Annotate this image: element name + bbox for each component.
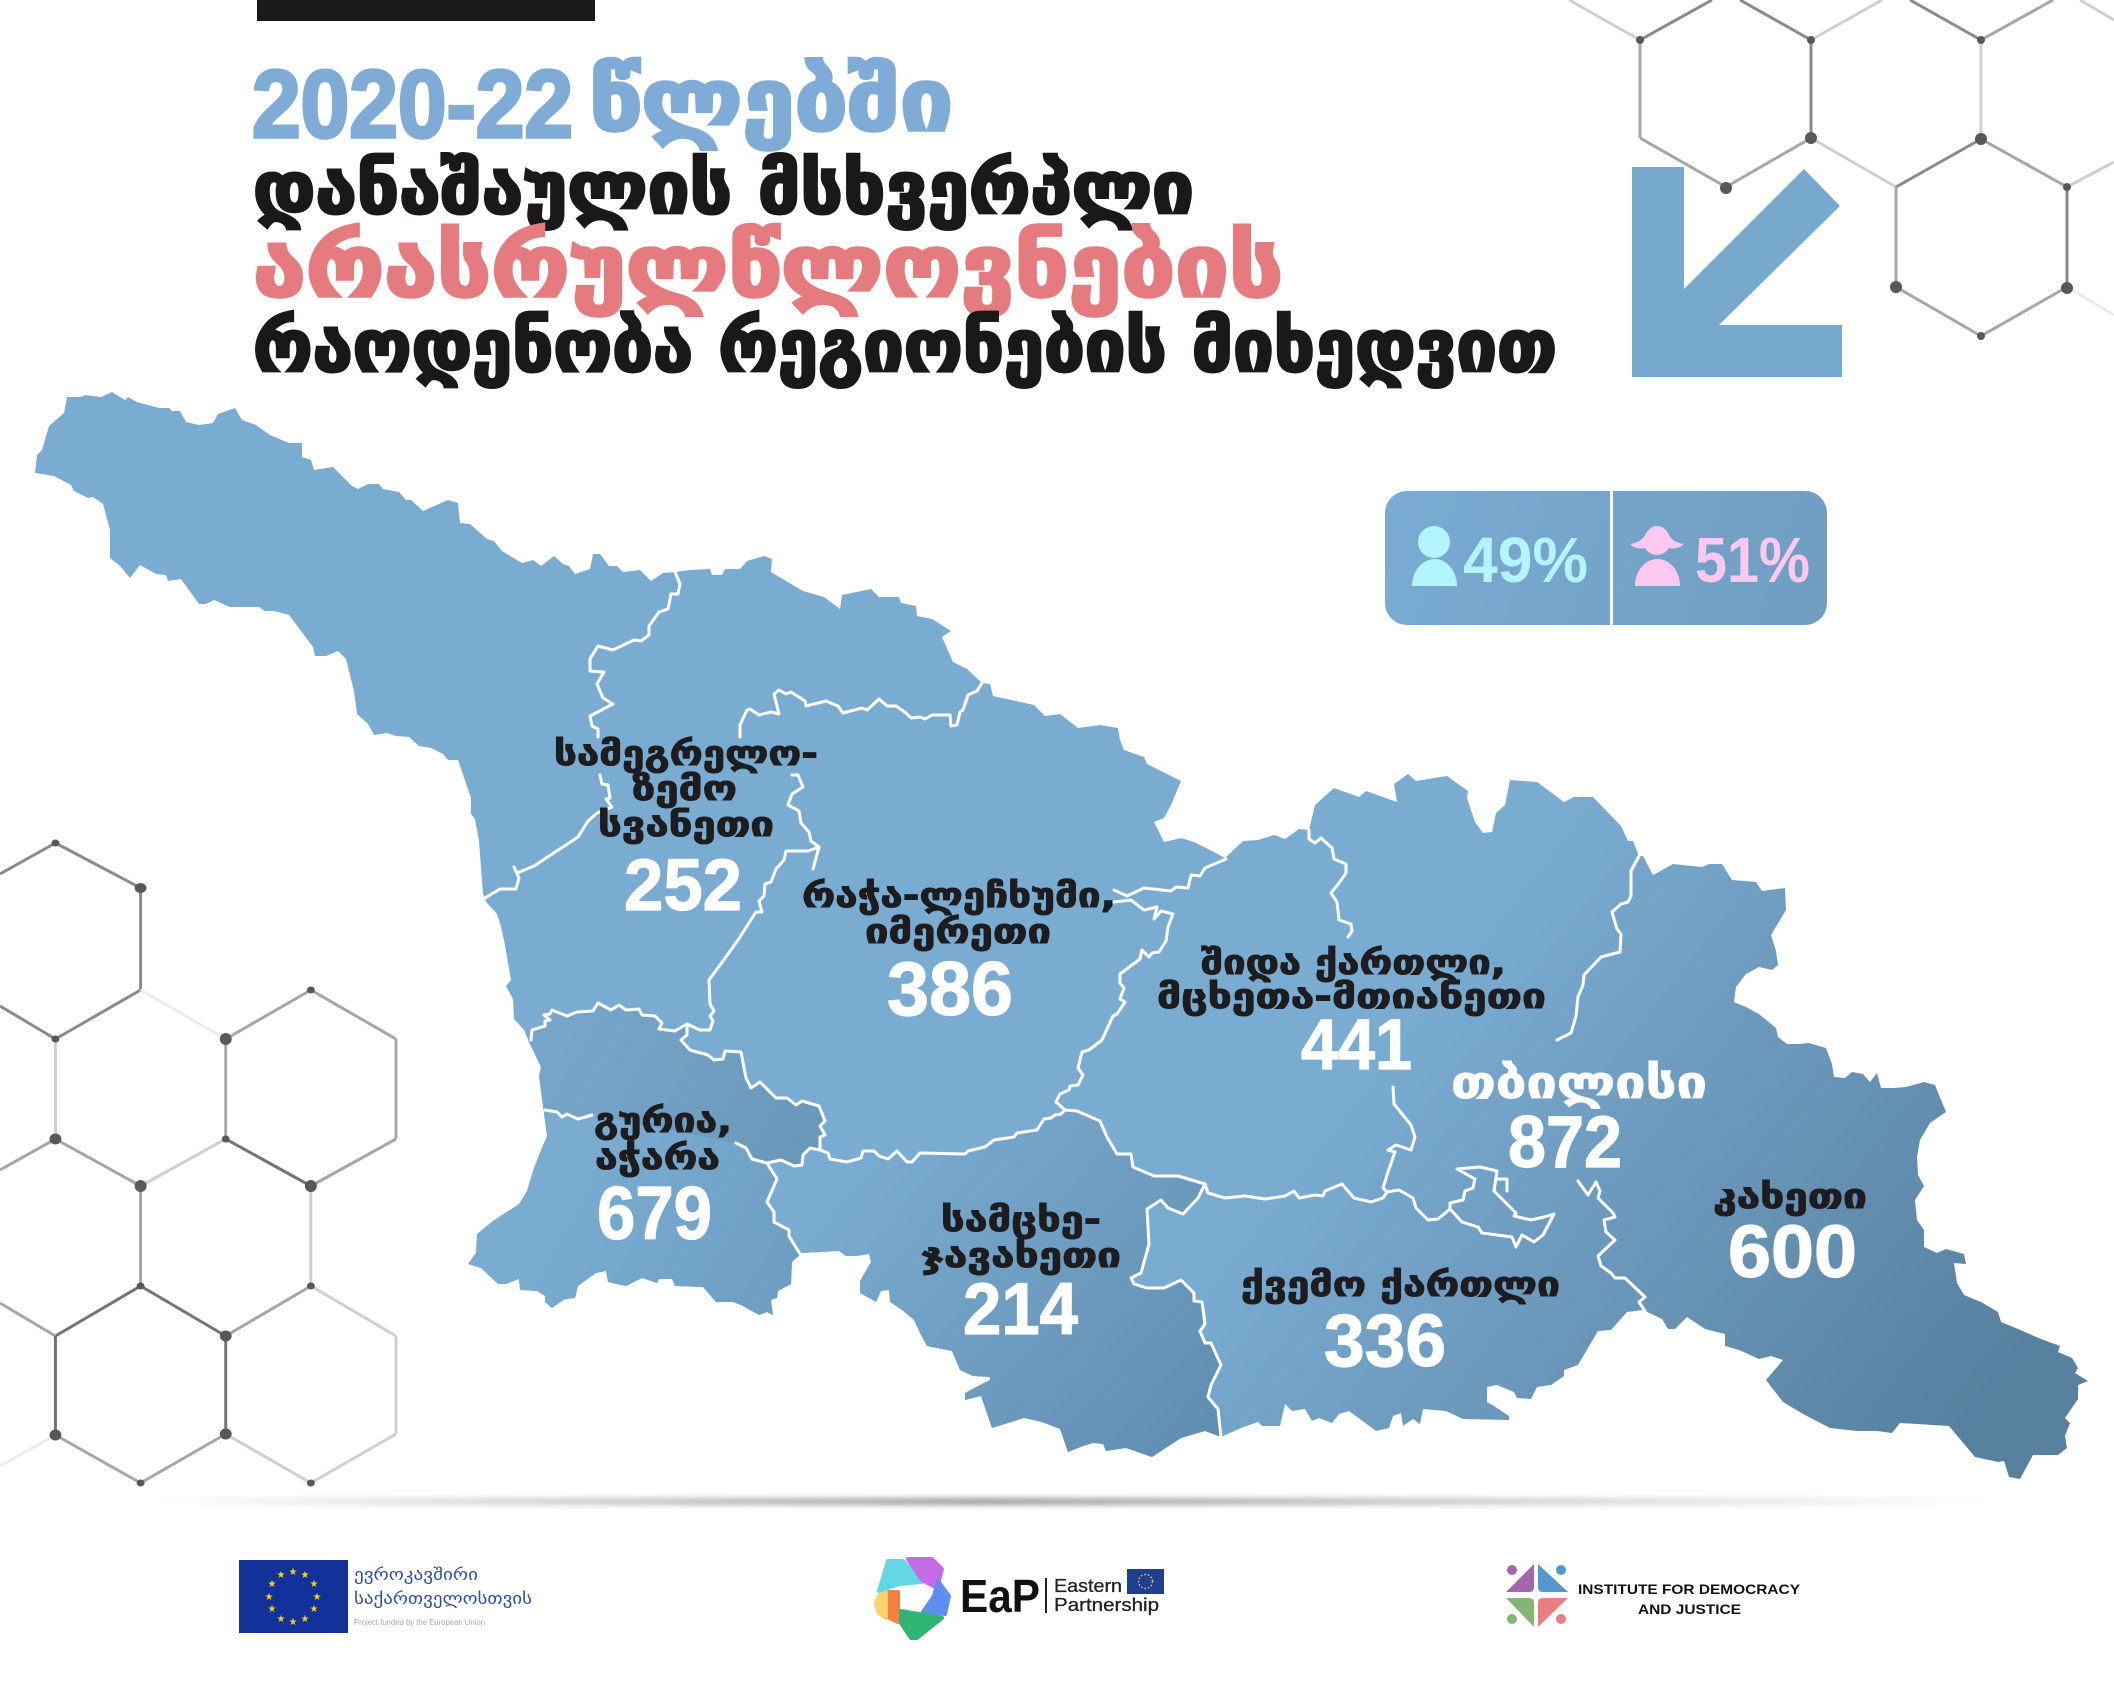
region label: Shida Kartli, Mtskheta-Mtianeti 441: მცხეთა-მთიანეთი: [1157, 977, 1546, 1017]
region label: Tbilisi 872: თბილისი: [1451, 1056, 1707, 1109]
region label: Racha-Lechkhumi, Imereti 386: 386: [887, 947, 1013, 1032]
region label: Samegrelo-Zemo Svaneti 252: სვანეთი: [598, 805, 774, 845]
title: დანაშაულის მსხვერპლი: [253, 146, 1194, 230]
logo: EU flag and text: ★: [310, 1604, 319, 1615]
ground shadow: [150, 1498, 2000, 1505]
region label: Guria, Ajara 679: [594, 1101, 732, 1255]
region label: Shida Kartli, Mtskheta-Mtianeti 441: [1157, 943, 1546, 1085]
logo: Institute for Democracy and Justice: INSTITUTE FOR DEMOCRACY: [1578, 1581, 1801, 1597]
logo: EU flag and text: ★: [289, 1567, 298, 1578]
region label: Samegrelo-Zemo Svaneti 252: [554, 734, 818, 926]
region label: Samegrelo-Zemo Svaneti 252: 252: [624, 845, 742, 926]
region label: Tbilisi 872: 872: [1508, 1102, 1622, 1183]
region label: Samtskhe-Javakheti 214: სამცხე-: [941, 1200, 1101, 1240]
logo: EU flag and text: ★: [268, 1579, 277, 1590]
logo: Eastern Partnership: Eastern: [1054, 1576, 1122, 1596]
title: [252, 51, 1557, 388]
logo: EU flag and text: ★: [313, 1592, 322, 1603]
title: არასრულწლოვნების: [253, 217, 1283, 317]
region label: Kvemo Kartli 336: [1241, 1265, 1560, 1382]
region label: Guria, Ajara 679: 679: [597, 1171, 712, 1255]
region label: Guria, Ajara 679: გურია,: [594, 1101, 732, 1141]
region label: Kvemo Kartli 336: ქვემო ქართლი: [1241, 1265, 1560, 1305]
logo: EU flag and text: საქართველოსთვის: [354, 1589, 532, 1608]
logo: Eastern Partnership: Partnership: [1054, 1595, 1159, 1615]
logo: EU flag and text: [239, 1560, 532, 1633]
title: წლებში: [589, 51, 953, 151]
boy percentage: 49%: [1463, 524, 1588, 596]
logo: EU flag and text: ★: [301, 1614, 310, 1625]
region label: Kakheti 600: კახეთი: [1713, 1177, 1867, 1217]
region label: Kakheti 600: [1713, 1177, 1867, 1293]
top black bar: [257, 0, 595, 21]
region label: Racha-Lechkhumi, Imereti 386: რაჭა-ლეჩხუმი,: [802, 876, 1116, 916]
logo: EU flag and text: ევროკავშირი: [354, 1565, 478, 1584]
region: Samtskhe-Javakheti: [802, 1112, 1220, 1457]
region label: Racha-Lechkhumi, Imereti 386: [802, 876, 1116, 1032]
logo: EU flag and text: ★: [301, 1570, 310, 1581]
region label: Samtskhe-Javakheti 214: ჯავახეთი: [921, 1236, 1121, 1276]
map base fill: [0, 380, 2114, 1490]
region label: Tbilisi 872: [1451, 1056, 1707, 1183]
logo: EU flag and text: ★: [277, 1614, 286, 1625]
region: Guria: [528, 1006, 823, 1164]
icon: girl: [1630, 526, 1684, 586]
icon: boy: [1412, 526, 1457, 586]
region label: Shida Kartli, Mtskheta-Mtianeti 441: 441: [1301, 1006, 1412, 1085]
region label: Kvemo Kartli 336: 336: [1324, 1299, 1446, 1382]
logo: EU flag and text: ★: [289, 1617, 298, 1628]
logo: EU flag and text: ★: [265, 1592, 274, 1603]
region label: Guria, Ajara 679: აჭარა: [595, 1138, 720, 1178]
hexagon pattern top right: [1569, 0, 2114, 340]
region borders: [485, 572, 1645, 1437]
region label: Samtskhe-Javakheti 214: 214: [963, 1269, 1078, 1350]
title: 2020-22: [252, 51, 573, 158]
logo: EU flag and text: ★: [277, 1570, 286, 1581]
logo: EU flag and text: ★: [310, 1579, 319, 1590]
region label: Shida Kartli, Mtskheta-Mtianeti 441: შიდა ქართლი,: [1201, 943, 1506, 983]
map of Georgia: [0, 380, 2114, 1500]
region label: Samegrelo-Zemo Svaneti 252: ზემო: [632, 769, 737, 809]
arrow pointing down-left: [1632, 167, 1842, 377]
hexagon pattern left: [0, 840, 396, 1486]
girl percentage: 51%: [1695, 524, 1810, 596]
region label: Racha-Lechkhumi, Imereti 386: იმერეთი: [865, 912, 1051, 952]
region label: Samegrelo-Zemo Svaneti 252: სამეგრელო-: [554, 734, 818, 774]
logo: Eastern Partnership: EaP: [960, 1570, 1040, 1622]
logo: Institute for Democracy and Justice: AND JUSTICE: [1638, 1601, 1741, 1617]
logo: EU flag and text: ★: [268, 1604, 277, 1615]
logo: Institute for Democracy and Justice: [1506, 1564, 1801, 1627]
region label: Samtskhe-Javakheti 214: [921, 1200, 1121, 1350]
logo: EU flag and text: Project funded by the European Union: [354, 1618, 485, 1627]
gender badge: [1385, 491, 1827, 625]
region label: Kakheti 600: 600: [1728, 1210, 1857, 1293]
title: რაოდენობა რეგიონების მიხედვით: [253, 304, 1557, 388]
logo: Eastern Partnership: [876, 1559, 1164, 1638]
region: Ajara: [468, 1111, 800, 1315]
